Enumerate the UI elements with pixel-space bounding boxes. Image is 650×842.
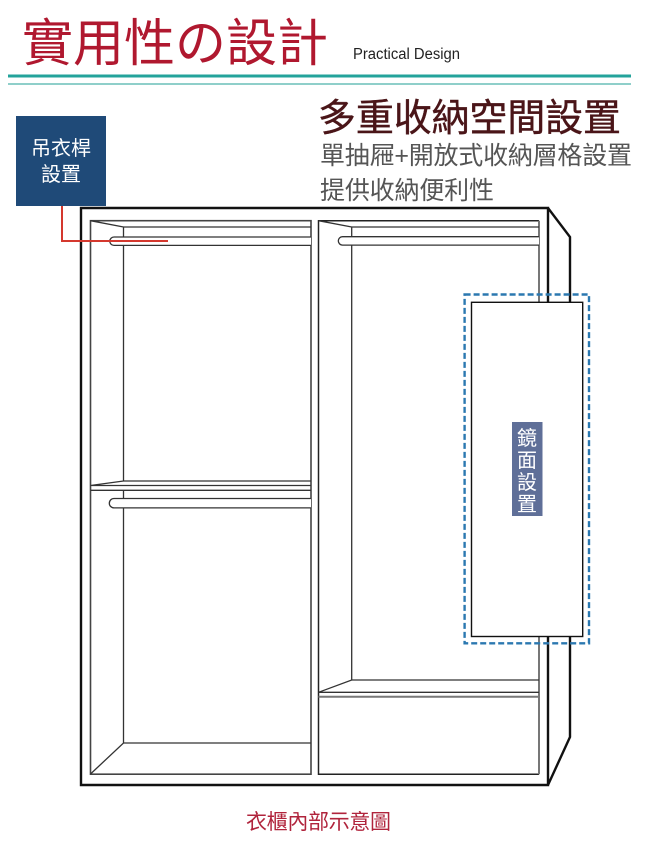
red leader line xyxy=(62,206,168,241)
left upper hanging rod xyxy=(110,237,311,245)
description text: 單抽屜+開放式收納層格設置 xyxy=(320,142,632,170)
mirror label xyxy=(512,422,542,516)
subtitle: Practical Design: Practical Design xyxy=(353,46,460,63)
caption: 衣櫃內部示意圖 xyxy=(246,811,391,834)
heading: multiple storage: 多重收納空間設置 xyxy=(318,98,621,140)
left compartment xyxy=(90,221,311,774)
mirror label: 置 xyxy=(517,494,537,516)
mirror dashed outline xyxy=(465,294,589,643)
mirror label: 鏡 xyxy=(517,427,537,450)
right compartment xyxy=(318,221,539,774)
left lower hanging rod xyxy=(109,498,311,508)
description text xyxy=(320,142,632,205)
right hanging rod xyxy=(338,237,539,245)
hanging rod callout xyxy=(16,116,106,206)
header rule xyxy=(8,74,631,85)
description text: 提供收納便利性 xyxy=(320,177,494,205)
wardrobe diagram xyxy=(81,208,570,785)
hanging rod callout: 吊衣桿 xyxy=(31,137,91,160)
mirror label: 面 xyxy=(517,450,537,472)
title: 實用性の設計 xyxy=(22,15,328,72)
wardrobe outer frame xyxy=(81,208,570,785)
hanging rod callout: 設置 xyxy=(41,163,81,186)
mirror panel xyxy=(465,294,589,643)
mirror label: 設 xyxy=(517,471,537,494)
